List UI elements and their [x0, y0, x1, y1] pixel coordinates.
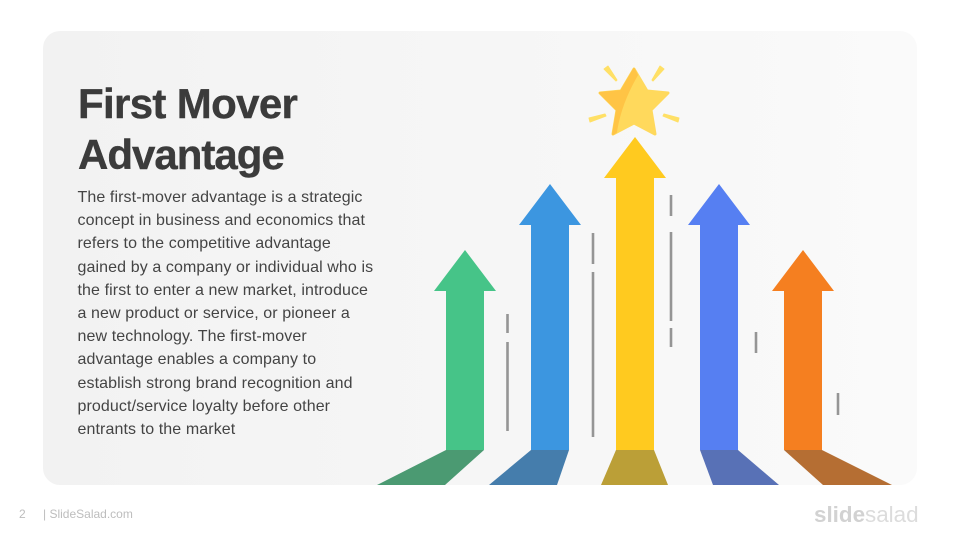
arrow: blue	[489, 184, 581, 485]
arrow: indigo	[688, 184, 779, 485]
text block: description: new technology. The first-mover	[78, 328, 307, 345]
text block: description: the first to enter a new market, introduce	[78, 282, 368, 299]
logo wordmark: slidesalad	[814, 502, 919, 527]
motion lines	[508, 195, 838, 437]
title	[78, 80, 298, 178]
panel: background card	[43, 31, 917, 485]
icon: star with rays	[589, 66, 679, 134]
footer site label: | SlideSalad.com	[43, 507, 133, 521]
arrow: yellow	[601, 137, 668, 485]
arrow: orange	[772, 250, 892, 485]
text block: description: advantage enables a company to	[78, 351, 316, 368]
arrow: green	[377, 250, 496, 485]
text block: description: concept in business and economics that	[78, 212, 365, 229]
text block: description: entrants to the market	[78, 421, 235, 438]
text block: description: a new product or service, or pioneer a	[78, 305, 350, 322]
title: Advantage	[78, 131, 284, 178]
text block: description	[78, 189, 373, 438]
text block: description: establish strong brand recognition and	[78, 375, 353, 392]
text block: description: gained by a company or individual who is	[78, 259, 373, 276]
text block: description: The first-mover advantage is a strategic	[78, 189, 363, 206]
text block: description: refers to the competitive advantage	[78, 235, 331, 252]
text block: description: product/service loyalty before other	[78, 398, 330, 415]
page number: 2	[19, 507, 26, 521]
title: First Mover	[78, 80, 297, 127]
